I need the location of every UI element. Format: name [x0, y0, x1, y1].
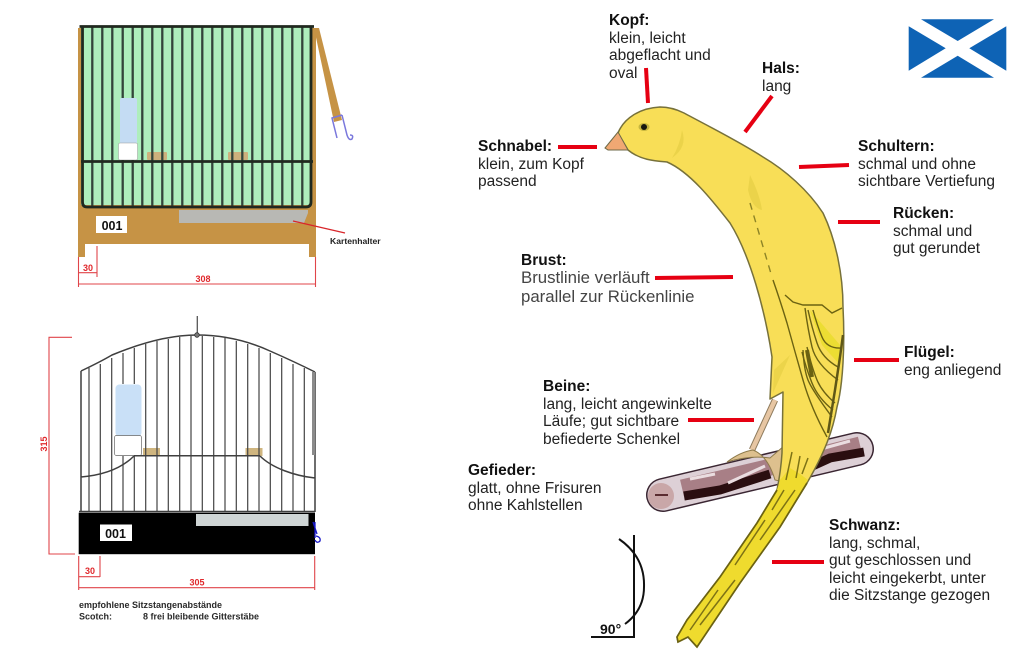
label: Schwanz: lang, schmal, — [829, 535, 920, 552]
label: Kopf: Kopf: — [609, 12, 649, 29]
callout: Kartenhalter — [293, 221, 381, 246]
cage outline — [79, 335, 315, 512]
plumage shading — [672, 130, 790, 393]
label: Kopf: abgeflacht und — [609, 47, 711, 64]
recommendation note: Scotch: — [79, 612, 112, 622]
tail feathers — [677, 452, 808, 647]
label: Gefieder: Gefieder: — [468, 462, 536, 479]
label: Schwanz: leicht eingekerbt, unter — [829, 570, 986, 587]
label: Kopf: klein, leicht — [609, 30, 686, 47]
dimension 30 — [79, 556, 100, 577]
label: Flügel: Flügel: — [904, 344, 955, 361]
label: Beine: befiederte Schenkel — [543, 431, 680, 448]
label: Brust: Brustlinie verläuft — [521, 268, 650, 287]
card holder — [196, 514, 308, 526]
panel: side cage drawing — [39, 316, 320, 622]
cage number — [96, 216, 127, 233]
wing feathers — [750, 203, 843, 437]
label: Gefieder — [468, 462, 602, 514]
angle diagram: 90 degrees — [591, 535, 644, 637]
cage number — [100, 524, 132, 541]
label: Schultern: sichtbare Vertiefung — [858, 173, 995, 190]
dimension 30: 30 — [83, 263, 93, 273]
label: Schwanz: Schwanz: — [829, 517, 900, 534]
card holder — [179, 210, 308, 223]
label: Rücken: Rücken: — [893, 205, 954, 222]
leg and foot — [727, 400, 784, 482]
label: Hals — [745, 60, 800, 132]
hook icon — [332, 115, 353, 140]
label: Flügel: eng anliegend — [904, 362, 1001, 379]
hook icon — [313, 522, 320, 542]
label: Rücken — [838, 205, 981, 257]
label: Beine: Beine: — [543, 378, 590, 395]
label: Brust — [521, 252, 733, 306]
water bottle — [114, 384, 142, 456]
label: Schultern — [799, 138, 995, 190]
cage number: 001 — [105, 527, 126, 541]
recommendation note — [79, 600, 259, 622]
perch holders — [147, 152, 248, 160]
label: Schnabel: passend — [478, 173, 537, 190]
bird body — [618, 107, 844, 647]
label: Schultern: schmal und ohne — [858, 156, 976, 173]
cage number: 001 — [102, 219, 122, 233]
angle diagram: 90 degrees: 90° — [600, 621, 621, 637]
wooden cage base — [78, 28, 316, 257]
cage frame — [80, 26, 314, 207]
beak — [605, 132, 628, 150]
label: Beine: Läufe; gut sichtbare — [543, 413, 679, 430]
dimension 305 — [79, 556, 315, 590]
label: Schultern: Schultern: — [858, 138, 935, 155]
green cage back — [81, 27, 312, 207]
label: Beine: lang, leicht angewinkelte — [543, 396, 712, 413]
label: Schnabel: Schnabel: — [478, 138, 552, 155]
dimension 308: 308 — [195, 274, 211, 284]
panel: front cage drawing — [78, 26, 381, 287]
label: Gefieder: glatt, ohne Frisuren — [468, 480, 602, 497]
label: Schwanz: die Sitzstange gezogen — [829, 587, 990, 604]
recommendation note: empfohlene Sitzstangenabstände — [79, 600, 222, 610]
label: Kopf: oval — [609, 65, 637, 82]
side strip — [312, 372, 315, 455]
recommendation note: 8 frei bleibende Gitterstäbe — [143, 612, 259, 622]
eye — [638, 123, 650, 131]
panel: canary illustration — [605, 107, 864, 647]
grid bars — [92, 27, 302, 206]
black base — [79, 513, 315, 554]
label: Kopf — [609, 12, 711, 103]
cage top handle — [195, 316, 199, 337]
label: Flügel — [854, 344, 1001, 379]
label: Brust: parallel zur Rückenlinie — [521, 287, 694, 306]
dimension 30: 30 — [85, 566, 95, 576]
dimension 30 — [78, 246, 97, 277]
dimension 308 — [78, 257, 316, 287]
icon: Scottish flag — [909, 19, 1006, 78]
door arm — [314, 28, 342, 122]
label: Beine — [543, 378, 754, 448]
perch — [648, 441, 864, 509]
water bottle — [118, 98, 138, 160]
callout: Kartenhalter: Kartenhalter — [330, 236, 381, 246]
label: Rücken: gut gerundet — [893, 240, 981, 257]
dimension 315 — [39, 337, 75, 554]
grid bars — [89, 336, 304, 511]
label: Hals: lang — [762, 78, 791, 95]
dimension 315: 315 — [39, 436, 49, 452]
label: Schnabel — [478, 138, 597, 190]
label: Brust: Brust: — [521, 252, 567, 269]
label: Gefieder: ohne Kahlstellen — [468, 497, 583, 514]
label: Schwanz — [772, 517, 990, 604]
perch holders — [143, 448, 262, 456]
label: Hals: Hals: — [762, 60, 800, 77]
dimension 305: 305 — [189, 578, 205, 588]
label: Schnabel: klein, zum Kopf — [478, 156, 585, 173]
label: Rücken: schmal und — [893, 223, 972, 240]
label: Schwanz: gut geschlossen und — [829, 552, 971, 569]
